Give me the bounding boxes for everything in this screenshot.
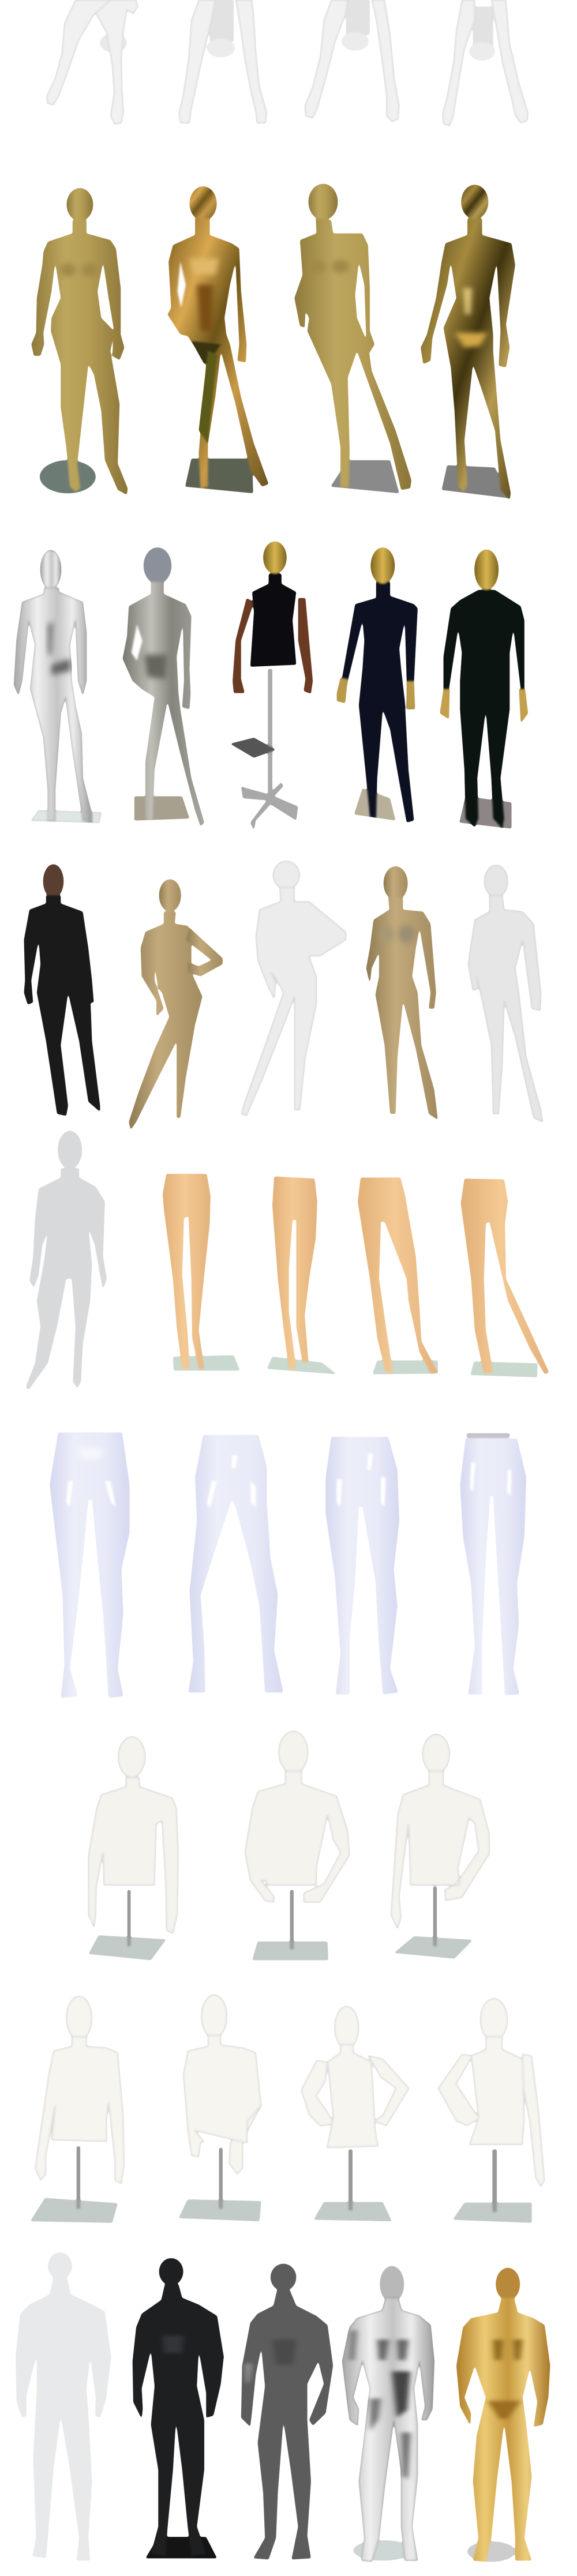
figure: white seated legs 2: [179, 0, 267, 123]
figure: glossy white legs 4: [460, 1433, 526, 1695]
figure: light grey female: [468, 865, 543, 1122]
panel: white bust forms on stands, rows seven and eight: [30, 1731, 545, 2223]
figure: matte gold female, round base: [31, 188, 128, 495]
panel: plus-size figure and leg forms, rows five and six: [26, 1131, 549, 1698]
figure: chrome gold female, hand on hip: [167, 186, 269, 493]
figure: plus-size grey female: [26, 1131, 107, 1390]
figure: flesh legs on glass base 2: [267, 1177, 337, 1375]
panel: male full-body mannequins, bottom row: [16, 2252, 550, 2562]
figure: white seated legs 1: [47, 0, 138, 125]
figure: champagne grey female: [366, 866, 438, 1120]
figure: male bust, arms down: [88, 1737, 178, 1960]
figure: matte black female with bronze head: [24, 864, 100, 1116]
figure: white seated legs 3: [305, 0, 399, 122]
figure: glossy white legs 1: [50, 1432, 130, 1698]
figure: flesh legs on glass base 3: [358, 1177, 438, 1375]
figure: matte gold female, posed: [294, 184, 411, 493]
figure: flesh legs on glass base 4: [461, 1178, 549, 1377]
figure: glossy white legs 2: [189, 1435, 283, 1692]
figure: champagne female, hand on hip: [129, 879, 223, 1130]
figure: steel chrome female: [122, 547, 204, 827]
figure: silver chrome male: [342, 2266, 434, 2562]
figure: male bust, arms bent: [245, 1731, 350, 1960]
figure: glossy black male with gold head and hands: [440, 550, 528, 829]
figure: white seated legs 4: [443, 0, 528, 126]
figure: black torso on wheeled stand with wooden arms: [230, 542, 313, 831]
figure: matte black male on base: [133, 2258, 224, 2558]
panel: white leg mannequins and gold row: [31, 0, 528, 500]
panel: chrome and black mannequins, rows three and four: [14, 542, 543, 1130]
figure: female bust, hands forward: [178, 1995, 261, 2221]
figure: female bust, one hand on hip: [438, 1999, 545, 2223]
figure: gold chrome male: [456, 2268, 550, 2562]
figure: glossy black female with gold head and hands: [337, 547, 418, 823]
figure: male bust, one arm bent: [391, 1734, 489, 1959]
figure: glossy white legs 3: [325, 1437, 399, 1695]
figure: female bust, arms down: [30, 1996, 125, 2223]
figure: female bust, hands on hips: [301, 2006, 409, 2221]
figure: dark grey male: [241, 2264, 333, 2559]
figure: dark chrome gold female: [421, 185, 515, 500]
figure: flesh legs on glass base 1: [163, 1174, 240, 1370]
figure: glossy white male: [16, 2252, 111, 2560]
figure: silver chrome female: [14, 550, 101, 823]
figure: glossy white female, hand on hip: [241, 861, 346, 1116]
